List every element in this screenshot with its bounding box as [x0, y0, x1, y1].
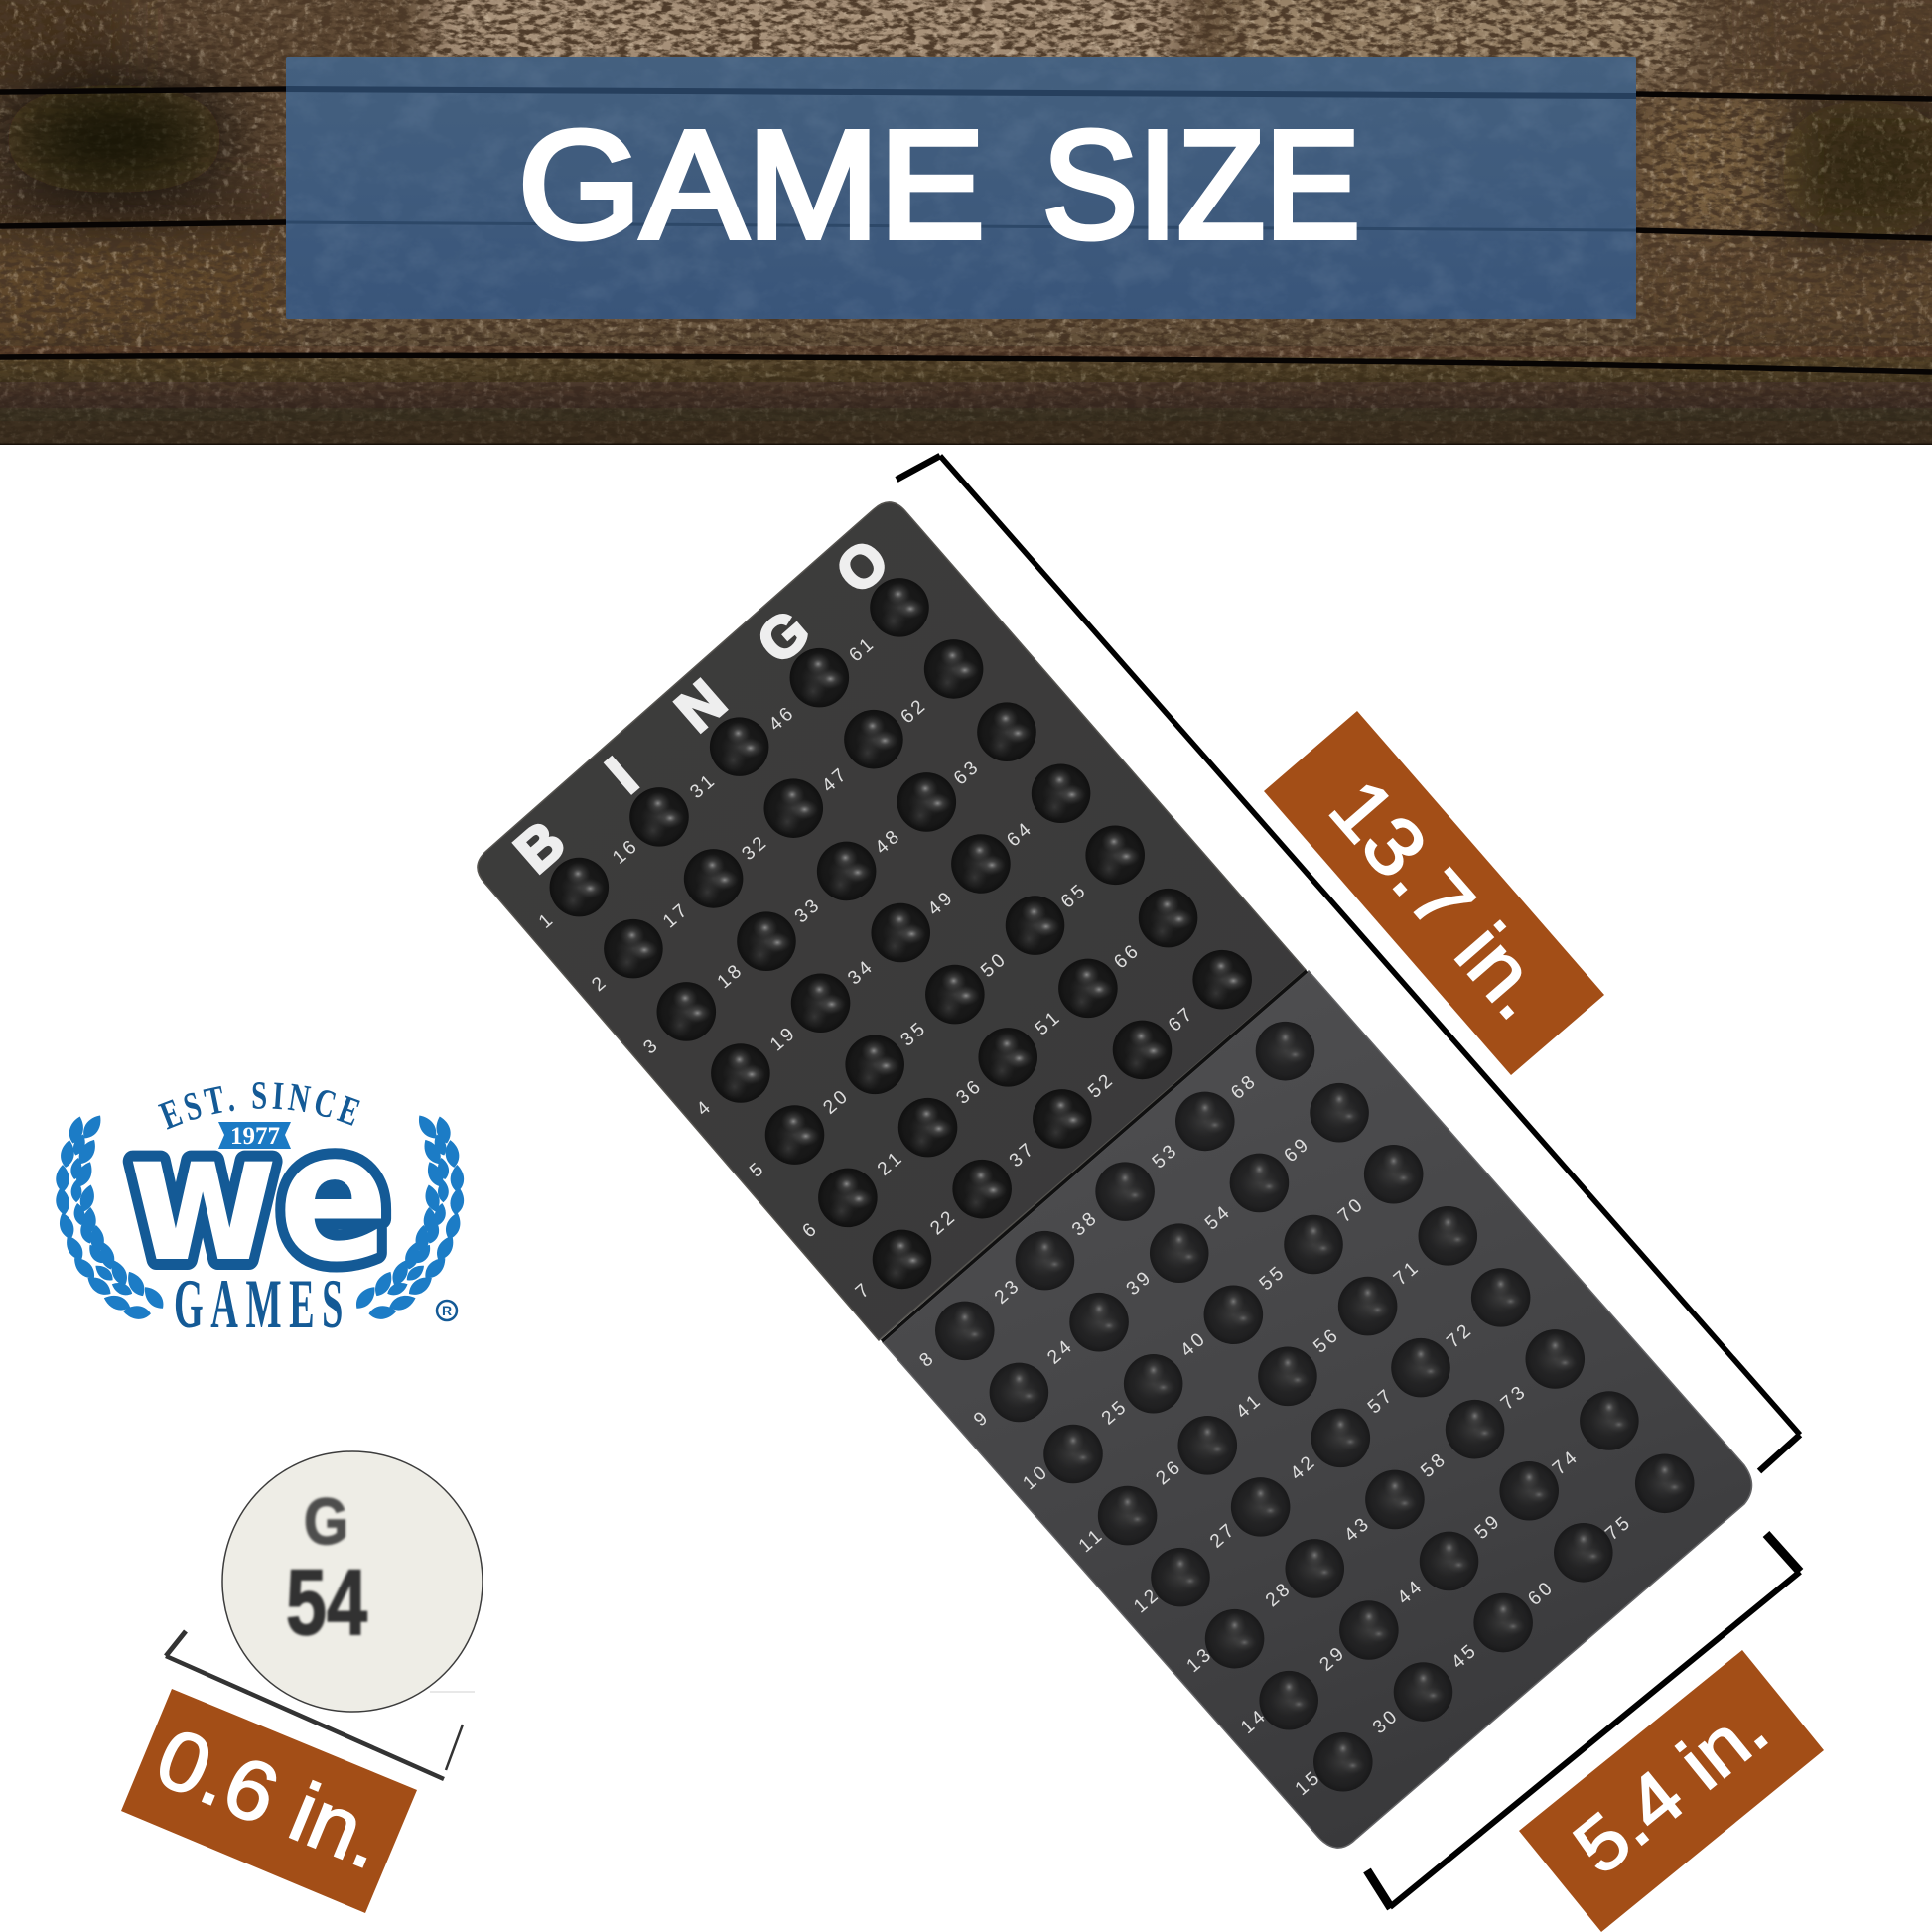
number labels 1–75: 24	[1043, 1335, 1078, 1369]
number labels 1–75: 44	[1394, 1576, 1428, 1609]
number labels 1–75: 40	[1176, 1327, 1211, 1361]
number labels 1–75: 66	[1110, 939, 1145, 973]
number labels 1–75: 8	[915, 1347, 940, 1372]
number labels 1–75: 46	[765, 702, 799, 736]
number labels 1–75: 28	[1262, 1578, 1297, 1611]
number labels 1–75: 53	[1149, 1139, 1182, 1173]
number labels 1–75: 74	[1549, 1446, 1584, 1479]
number labels 1–75: 30	[1369, 1705, 1404, 1738]
number labels 1–75: 16	[609, 835, 643, 869]
number labels 1–75: 57	[1364, 1384, 1399, 1418]
bingo ball	[222, 1451, 483, 1712]
number labels 1–75: 72	[1443, 1319, 1477, 1353]
number labels 1–75: 11	[1075, 1524, 1108, 1557]
number labels 1–75: 56	[1310, 1324, 1344, 1358]
number labels 1–75: 64	[1003, 817, 1037, 851]
number labels 1–75: 35	[897, 1018, 931, 1050]
bingo ball: G	[304, 1484, 348, 1558]
thin stray line	[430, 1691, 475, 1693]
wordmark: we: we	[127, 1094, 389, 1302]
number labels 1–75: 14	[1237, 1705, 1272, 1738]
number labels 1–75: 55	[1256, 1261, 1290, 1295]
number labels 1–75: 58	[1417, 1449, 1451, 1482]
number labels 1–75: 37	[1006, 1138, 1039, 1172]
heading: GAME SIZE	[518, 99, 1360, 270]
title banner	[286, 57, 1636, 319]
board panel: upper half	[478, 502, 1306, 1340]
number labels 1–75: 50	[977, 948, 1012, 982]
number labels 1–75: 26	[1153, 1455, 1186, 1489]
registered mark	[437, 1301, 457, 1320]
number labels 1–75: 12	[1130, 1584, 1165, 1617]
number labels 1–75: 2	[588, 971, 613, 996]
number labels 1–75: 9	[970, 1406, 994, 1431]
board panel: lower half	[883, 971, 1751, 1848]
left laurel	[54, 1112, 168, 1320]
number labels 1–75: 67	[1165, 1003, 1199, 1036]
number labels 1–75: 21	[874, 1147, 908, 1180]
number labels 1–75: 39	[1123, 1266, 1157, 1300]
right laurel	[351, 1112, 466, 1320]
number labels 1–75: 68	[1227, 1070, 1262, 1104]
number labels 1–75: 25	[1098, 1396, 1133, 1430]
number labels 1–75: 70	[1334, 1193, 1369, 1227]
wood header background	[0, 0, 1932, 491]
number labels 1–75: 71	[1390, 1256, 1425, 1290]
number labels 1–75: 75	[1602, 1511, 1636, 1545]
dimension label: 0.6 in.	[121, 1689, 417, 1913]
WE Games logo	[56, 1082, 465, 1343]
dimension label: 0.6 in.: 0.6 in.	[144, 1710, 398, 1886]
number labels 1–75: 34	[844, 955, 879, 989]
bracket: ball diameter	[166, 1631, 463, 1779]
number labels 1–75: 32	[739, 831, 772, 865]
dimension label: 13.7 in.	[1264, 711, 1604, 1075]
number labels 1–75: 65	[1057, 880, 1092, 912]
number labels 1–75: 61	[846, 632, 880, 666]
number labels 1–75: 20	[819, 1085, 854, 1119]
bingo master board	[478, 502, 1751, 1848]
text: EST. SINCE: EST. SINCE	[157, 1082, 385, 1177]
number labels 1–75: 1	[535, 908, 559, 933]
number labels 1–75: 52	[1084, 1069, 1119, 1103]
bracket: board width	[1367, 1534, 1800, 1908]
dimension label: 5.4 in.	[1519, 1650, 1824, 1932]
number labels 1–75: 51	[1032, 1006, 1066, 1039]
BINGO lettering: N	[664, 668, 738, 744]
number labels 1–75: 15	[1292, 1766, 1325, 1800]
number labels 1–75: 27	[1206, 1519, 1241, 1553]
number labels 1–75: 63	[950, 756, 985, 789]
number labels 1–75: 73	[1497, 1381, 1532, 1415]
ball cups: upper panel	[550, 578, 1252, 1289]
number labels 1–75: 45	[1448, 1639, 1482, 1673]
number labels 1–75: 54	[1201, 1200, 1236, 1234]
dimension label: 13.7 in.: 13.7 in.	[1312, 763, 1567, 1035]
registered mark: R	[442, 1303, 452, 1318]
ribbon: 1977: 1977	[230, 1123, 280, 1150]
number labels 1–75: 41	[1232, 1389, 1267, 1423]
BINGO lettering: B	[503, 809, 577, 886]
number labels 1–75: 48	[872, 825, 905, 859]
BINGO lettering	[503, 527, 900, 886]
number labels 1–75: 22	[926, 1205, 961, 1239]
number labels 1–75: 42	[1287, 1450, 1320, 1484]
number labels 1–75: 23	[991, 1275, 1026, 1309]
number labels 1–75: 49	[924, 887, 959, 920]
number labels 1–75: 6	[799, 1217, 823, 1242]
board contents	[503, 527, 1695, 1800]
number labels 1–75: 19	[766, 1022, 801, 1055]
number labels 1–75: 36	[952, 1075, 987, 1109]
ball cups: lower panel	[935, 1022, 1695, 1792]
bracket: board length	[897, 456, 1800, 1471]
number labels 1–75: 59	[1471, 1510, 1506, 1544]
number labels 1–75: 4	[693, 1096, 717, 1120]
text: GAMES: GAMES	[174, 1266, 350, 1343]
number labels 1–75: 3	[639, 1034, 664, 1058]
number labels 1–75: 38	[1068, 1207, 1103, 1241]
BINGO lettering: G	[746, 598, 822, 676]
number labels 1–75: 29	[1316, 1642, 1350, 1676]
number labels 1–75	[535, 632, 1636, 1800]
bingo ball: 54	[286, 1550, 367, 1654]
number labels 1–75: 18	[714, 959, 748, 993]
number labels 1–75: 62	[897, 694, 931, 728]
dimension label: 5.4 in.: 5.4 in.	[1559, 1686, 1783, 1890]
number labels 1–75: 13	[1183, 1643, 1217, 1677]
heading: GAME SIZE: GAME	[518, 99, 985, 270]
number labels 1–75: 31	[686, 769, 721, 803]
ribbon: 1977	[218, 1122, 291, 1150]
number labels 1–75: 5	[746, 1158, 769, 1181]
number labels 1–75: 60	[1524, 1577, 1559, 1610]
heading: GAME SIZE: SIZE	[1042, 99, 1360, 270]
number labels 1–75: 17	[659, 898, 694, 932]
number labels 1–75: 10	[1019, 1460, 1053, 1494]
number labels 1–75: 47	[818, 763, 853, 797]
number labels 1–75: 7	[852, 1278, 876, 1303]
number labels 1–75: 43	[1340, 1512, 1375, 1546]
hinge line between panels	[882, 971, 1307, 1341]
BINGO lettering: O	[824, 527, 900, 606]
number labels 1–75: 69	[1281, 1133, 1314, 1167]
number labels 1–75: 33	[791, 894, 825, 927]
BINGO lettering: I	[595, 746, 649, 805]
